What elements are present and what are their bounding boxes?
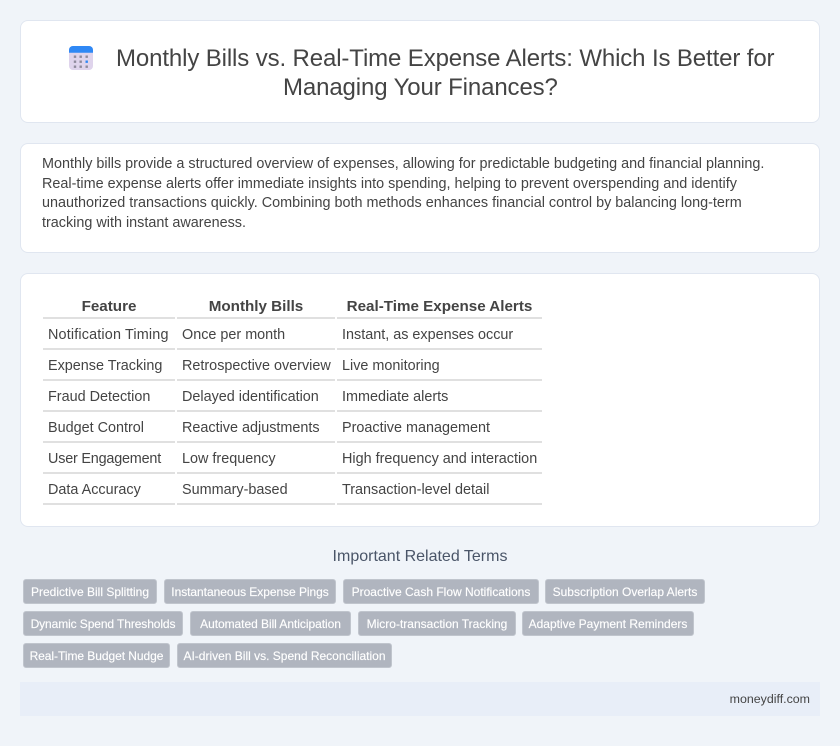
comparison table: Immediate alerts xyxy=(342,389,448,405)
comparison table: Instant, as expenses occur xyxy=(342,327,513,343)
comparison table: Low frequency xyxy=(182,451,276,467)
comparison table: Summary-based xyxy=(182,482,288,498)
footer source label: moneydiff.com xyxy=(730,692,810,706)
summary text: tracking with instant awareness. xyxy=(42,215,246,231)
panel: title card xyxy=(20,20,820,123)
related term tags: Dynamic Spend Thresholds xyxy=(31,617,175,631)
comparison table: Proactive management xyxy=(342,420,490,436)
comparison table: Delayed identification xyxy=(182,389,319,405)
summary text: Monthly bills provide a structured overview of expenses, allowing for predictable budgeting and financial planning. xyxy=(42,156,764,172)
comparison table: Notification Timing xyxy=(48,327,169,343)
title line 2: Managing Your Finances? xyxy=(283,74,558,101)
related term tags: Subscription Overlap Alerts xyxy=(553,585,697,599)
comparison table: Monthly Bills xyxy=(209,298,303,315)
comparison table: Expense Tracking xyxy=(48,358,162,374)
comparison table: Transaction-level detail xyxy=(342,482,489,498)
panel: comparison table card xyxy=(20,273,820,527)
comparison table: Retrospective overview xyxy=(182,358,331,374)
related term tags: AI-driven Bill vs. Spend Reconciliation xyxy=(183,649,386,663)
comparison table: Data Accuracy xyxy=(48,482,141,498)
related term tags: Micro-transaction Tracking xyxy=(367,617,507,631)
related term tags: Predictive Bill Splitting xyxy=(31,585,149,599)
related term tags: Automated Bill Anticipation xyxy=(200,617,341,631)
summary text: Real-time expense alerts offer immediate insights into spending, helping to prevent overspending and identify xyxy=(42,176,737,192)
comparison table: Fraud Detection xyxy=(48,389,150,405)
related term tags: Proactive Cash Flow Notifications xyxy=(352,585,530,599)
comparison table: High frequency and interaction xyxy=(342,451,537,467)
related term tags: Adaptive Payment Reminders xyxy=(529,617,687,631)
title line 1: Monthly Bills vs. Real-Time Expense Alerts: Which Is Better for xyxy=(116,45,774,72)
footer bar xyxy=(20,682,820,716)
summary text xyxy=(42,156,764,231)
comparison table xyxy=(43,298,542,505)
icon: calendar xyxy=(69,46,93,70)
comparison table: Reactive adjustments xyxy=(182,420,320,436)
summary text: unauthorized transactions quickly. Combining both methods enhances financial control by balancing long-term xyxy=(42,195,742,211)
related term tags xyxy=(23,579,705,668)
comparison table: Budget Control xyxy=(48,420,144,436)
comparison table: User Engagement xyxy=(48,451,161,467)
heading: important related terms: Important Related Terms xyxy=(333,548,507,565)
related term tags: Instantaneous Expense Pings xyxy=(171,585,329,599)
comparison table: Real-Time Expense Alerts xyxy=(347,298,532,315)
comparison table: Feature xyxy=(82,298,136,315)
comparison table: Once per month xyxy=(182,327,285,343)
panel: summary card xyxy=(20,143,820,253)
comparison table: Live monitoring xyxy=(342,358,440,374)
related term tags: Real-Time Budget Nudge xyxy=(30,649,163,663)
